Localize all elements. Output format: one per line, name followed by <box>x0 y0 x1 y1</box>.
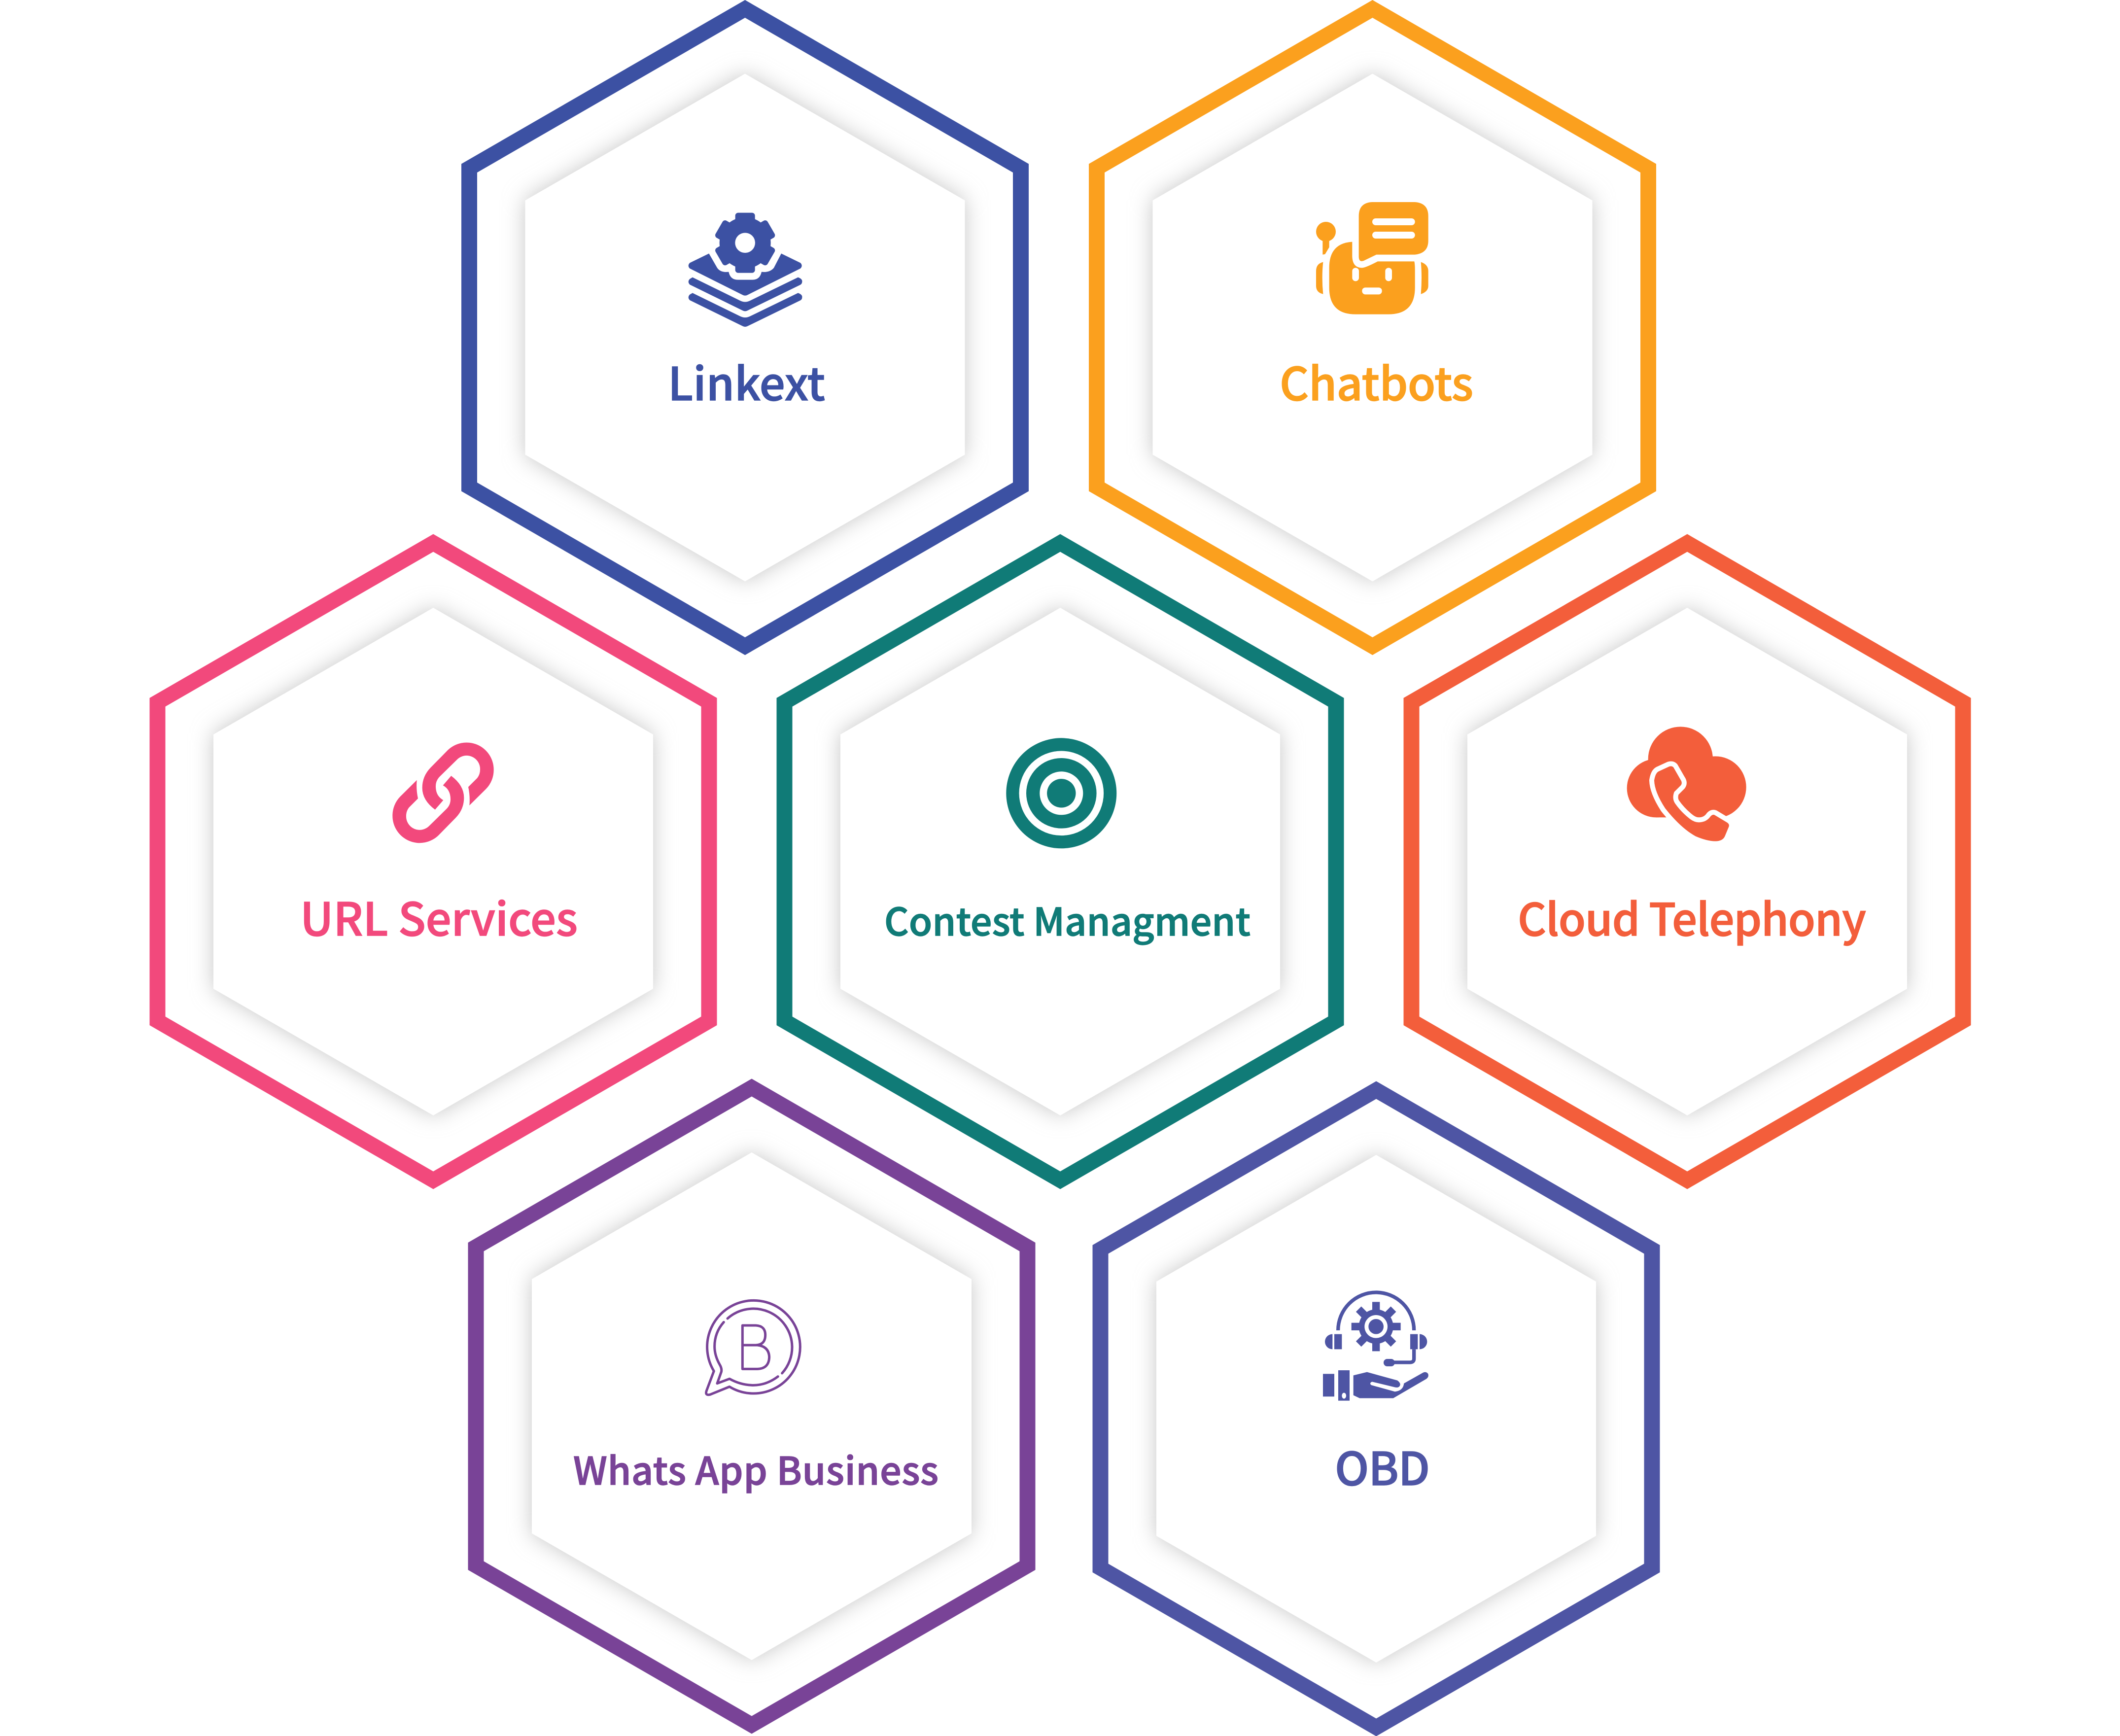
panel: Linkext <box>461 0 1029 655</box>
icon: chain link <box>392 742 494 843</box>
label: Linkext: Linkext <box>668 348 825 414</box>
hexagon frame: Contest Managment <box>777 534 1344 1189</box>
panel: OBD <box>1092 1081 1660 1736</box>
hexagon frame: Whats App Business <box>468 1078 1035 1734</box>
hexagon frame: OBD <box>1092 1081 1660 1736</box>
icon: concentric target <box>1006 738 1116 848</box>
panel: Cloud Telephony <box>1404 534 1971 1189</box>
panel: URL Services <box>150 534 717 1189</box>
label: Chatbots: Chatbots <box>1280 348 1473 414</box>
icon: cloud with phone <box>1627 727 1746 841</box>
hexagon frame: Chatbots <box>1089 0 1656 655</box>
label: OBD: OBD <box>1335 1433 1430 1498</box>
panel: Contest Managment <box>777 534 1344 1189</box>
label: Whats App Business: Whats App Business <box>573 1441 938 1496</box>
hexagon frame: Linkext <box>461 0 1029 655</box>
icon: gear on stacked layers <box>689 213 802 327</box>
panel: Whats App Business <box>468 1078 1035 1734</box>
panel: Chatbots <box>1089 0 1656 655</box>
hexagon frame: URL Services <box>150 534 717 1189</box>
label: URL Services: URL Services <box>300 883 578 949</box>
icon: robot with speech bubble <box>1316 202 1428 314</box>
icon: WhatsApp Business B bubble <box>706 1300 800 1395</box>
hexagon frame: Cloud Telephony <box>1404 534 1971 1189</box>
label: Contest Managment: Contest Managment <box>884 892 1251 947</box>
icon: headset gear and hand <box>1323 1292 1428 1401</box>
label: Cloud Telephony: Cloud Telephony <box>1518 884 1866 948</box>
